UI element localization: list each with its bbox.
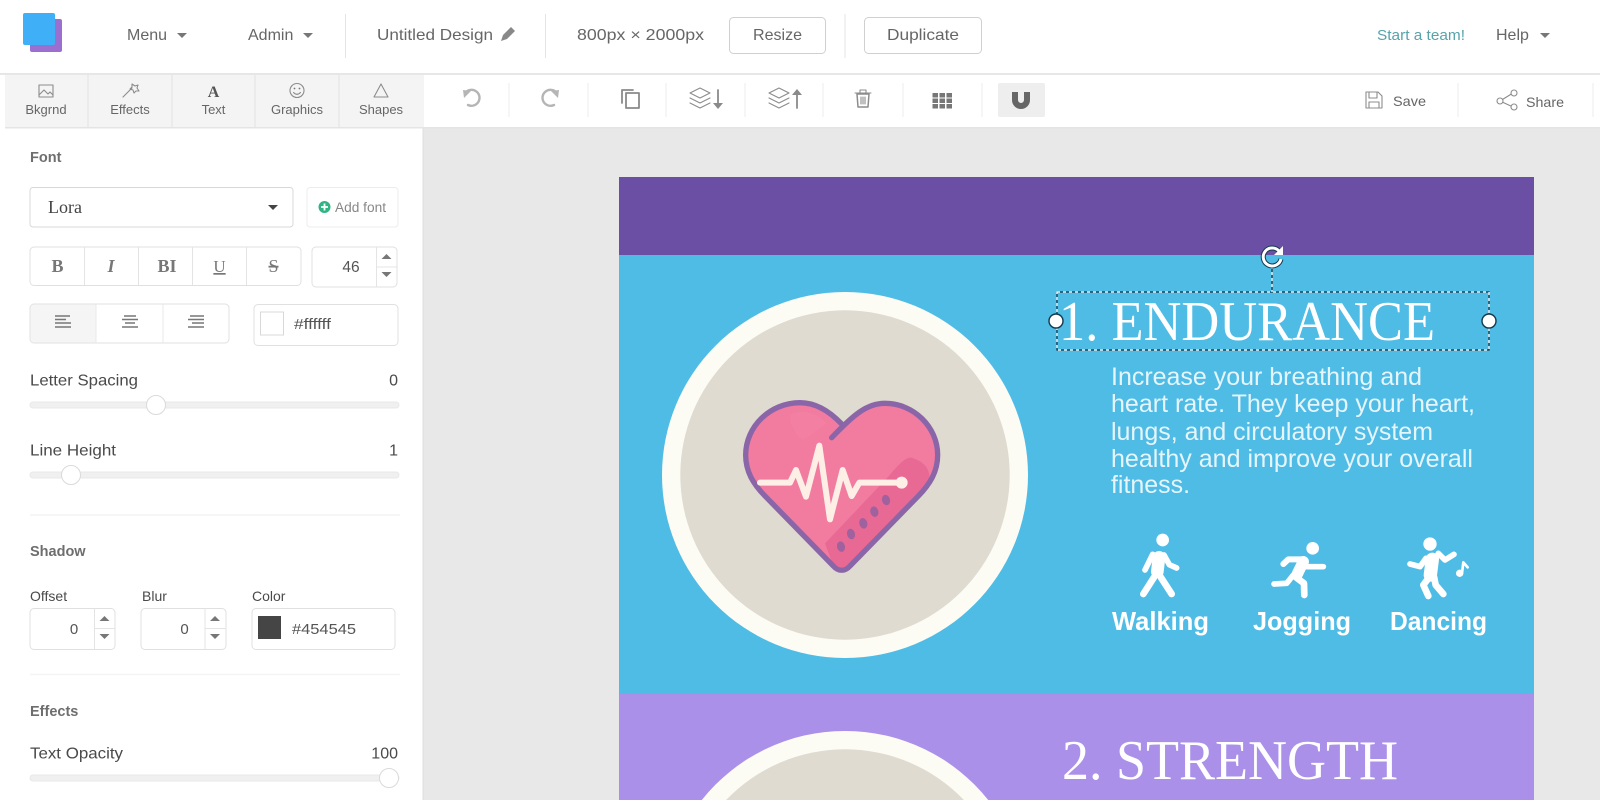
activity: dancing <box>1390 537 1487 636</box>
panel: strength section <box>619 694 1534 800</box>
tab: text <box>202 84 226 117</box>
tab: effects: Effects <box>110 102 150 117</box>
heading: effects: Effects <box>30 704 78 720</box>
icon: redo <box>542 90 559 106</box>
activity: jogging <box>1253 542 1351 636</box>
admin dropdown: Admin <box>248 27 293 44</box>
panel: left sidebar <box>0 75 424 800</box>
tab: shapes <box>359 84 404 117</box>
activity: jogging: Jogging <box>1253 606 1351 636</box>
tab: text: A <box>208 84 220 101</box>
control: shadow offset <box>30 588 115 650</box>
control: shadow colour <box>252 588 395 650</box>
heading: 1. Endurance: 1. ENDURANCE <box>1059 291 1435 353</box>
link: start a team: Start a team! <box>1377 28 1465 44</box>
panel: action toolbar <box>424 75 1600 128</box>
control: text colour <box>254 304 398 346</box>
button: share: Share <box>1526 94 1564 110</box>
tab: background <box>25 85 67 117</box>
icon: bring forward <box>769 88 802 108</box>
slider: letter spacing <box>30 372 399 414</box>
control: font size <box>312 247 397 287</box>
text block: endurance description: Increase your breathing and <box>1111 363 1422 391</box>
logo <box>23 13 62 52</box>
control: text style buttons: U <box>213 257 226 276</box>
menu dropdown: Menu <box>127 27 167 44</box>
activity: dancing: Dancing <box>1390 606 1487 636</box>
button: duplicate <box>864 18 982 54</box>
control: shadow blur: 0 <box>180 621 189 638</box>
control: shadow blur: Blur <box>142 588 167 604</box>
button: save: Save <box>1393 93 1426 109</box>
help dropdown: Help <box>1496 27 1529 44</box>
panel: infographic canvas <box>619 177 1534 800</box>
button: save <box>1366 92 1426 109</box>
text block: endurance description: healthy and improve your overall <box>1111 445 1473 473</box>
control: shadow colour: #454545 <box>292 621 356 638</box>
slider: text opacity <box>30 746 399 788</box>
slider: text opacity: 100 <box>371 746 398 762</box>
icon: undo <box>463 90 480 106</box>
tab: graphics: Graphics <box>271 102 324 117</box>
activity: walking: Walking <box>1112 606 1209 636</box>
tab: graphics <box>271 84 324 117</box>
help dropdown <box>1496 27 1550 44</box>
button: magnet active <box>998 83 1045 117</box>
control: shadow offset: Offset <box>30 588 67 604</box>
admin dropdown <box>248 27 313 44</box>
control: font size: 46 <box>342 259 360 276</box>
tab: shapes: Shapes <box>359 102 404 117</box>
control: shadow offset: 0 <box>70 621 78 638</box>
control: text alignment <box>30 304 229 343</box>
illustration: second circle <box>702 731 988 800</box>
canvas size: 800px × 2000px <box>577 27 704 44</box>
heading: font: Font <box>30 150 62 166</box>
button: add font: Add font <box>335 200 386 215</box>
control: text colour: #ffffff <box>294 317 332 333</box>
button: add font <box>307 188 398 227</box>
text block: endurance description: heart rate. They keep your heart, <box>1111 390 1475 418</box>
panel: top navigation bar <box>0 0 1600 74</box>
heading: shadow: Shadow <box>30 544 86 560</box>
control: text style buttons: I <box>106 256 115 276</box>
slider: line height <box>30 442 399 484</box>
panel: element tabs <box>5 75 424 128</box>
icon: rotate handle <box>1263 246 1283 266</box>
panel: endurance section <box>619 246 1534 694</box>
slider: letter spacing: Letter Spacing <box>30 372 138 390</box>
text block: endurance description <box>1111 363 1475 499</box>
selection box with handles <box>1049 246 1496 350</box>
slider: text opacity: Text Opacity <box>30 746 123 762</box>
icon: send backward <box>690 88 723 109</box>
tab: background: Bkgrnd <box>25 102 67 117</box>
control: text style buttons <box>30 247 301 286</box>
slider: line height: Line Height <box>30 442 117 460</box>
icon: copy <box>622 90 639 108</box>
menu dropdown <box>127 27 187 44</box>
control: text style buttons: BI <box>157 256 177 276</box>
control: font select <box>30 188 293 227</box>
activity: walking <box>1112 534 1209 636</box>
control: shadow colour: Color <box>252 588 286 604</box>
button: resize: Resize <box>753 27 802 44</box>
icon: heart with pulse <box>746 403 938 570</box>
control: text style buttons: S <box>268 256 279 276</box>
heading: 2. Strength: 2. STRENGTH <box>1062 730 1398 792</box>
button: resize <box>730 18 826 54</box>
control: shadow blur <box>141 588 226 650</box>
control: font select: Lora <box>48 197 82 217</box>
tab: text: Text <box>202 102 226 117</box>
button: share <box>1497 90 1564 110</box>
slider: line height: 1 <box>389 442 398 460</box>
tab: effects <box>110 84 150 117</box>
icon: grid <box>932 93 952 108</box>
illustration: heart in circle <box>662 292 1028 658</box>
text block: endurance description: lungs, and circulatory system <box>1111 418 1433 446</box>
infographic top purple band <box>619 177 1534 255</box>
control: text style buttons: B <box>51 256 64 276</box>
slider: letter spacing: 0 <box>389 372 398 390</box>
text block: endurance description: fitness. <box>1111 471 1190 499</box>
design title with pencil: Untitled Design <box>377 27 493 44</box>
button: duplicate: Duplicate <box>887 27 959 44</box>
icon: trash <box>855 90 871 107</box>
